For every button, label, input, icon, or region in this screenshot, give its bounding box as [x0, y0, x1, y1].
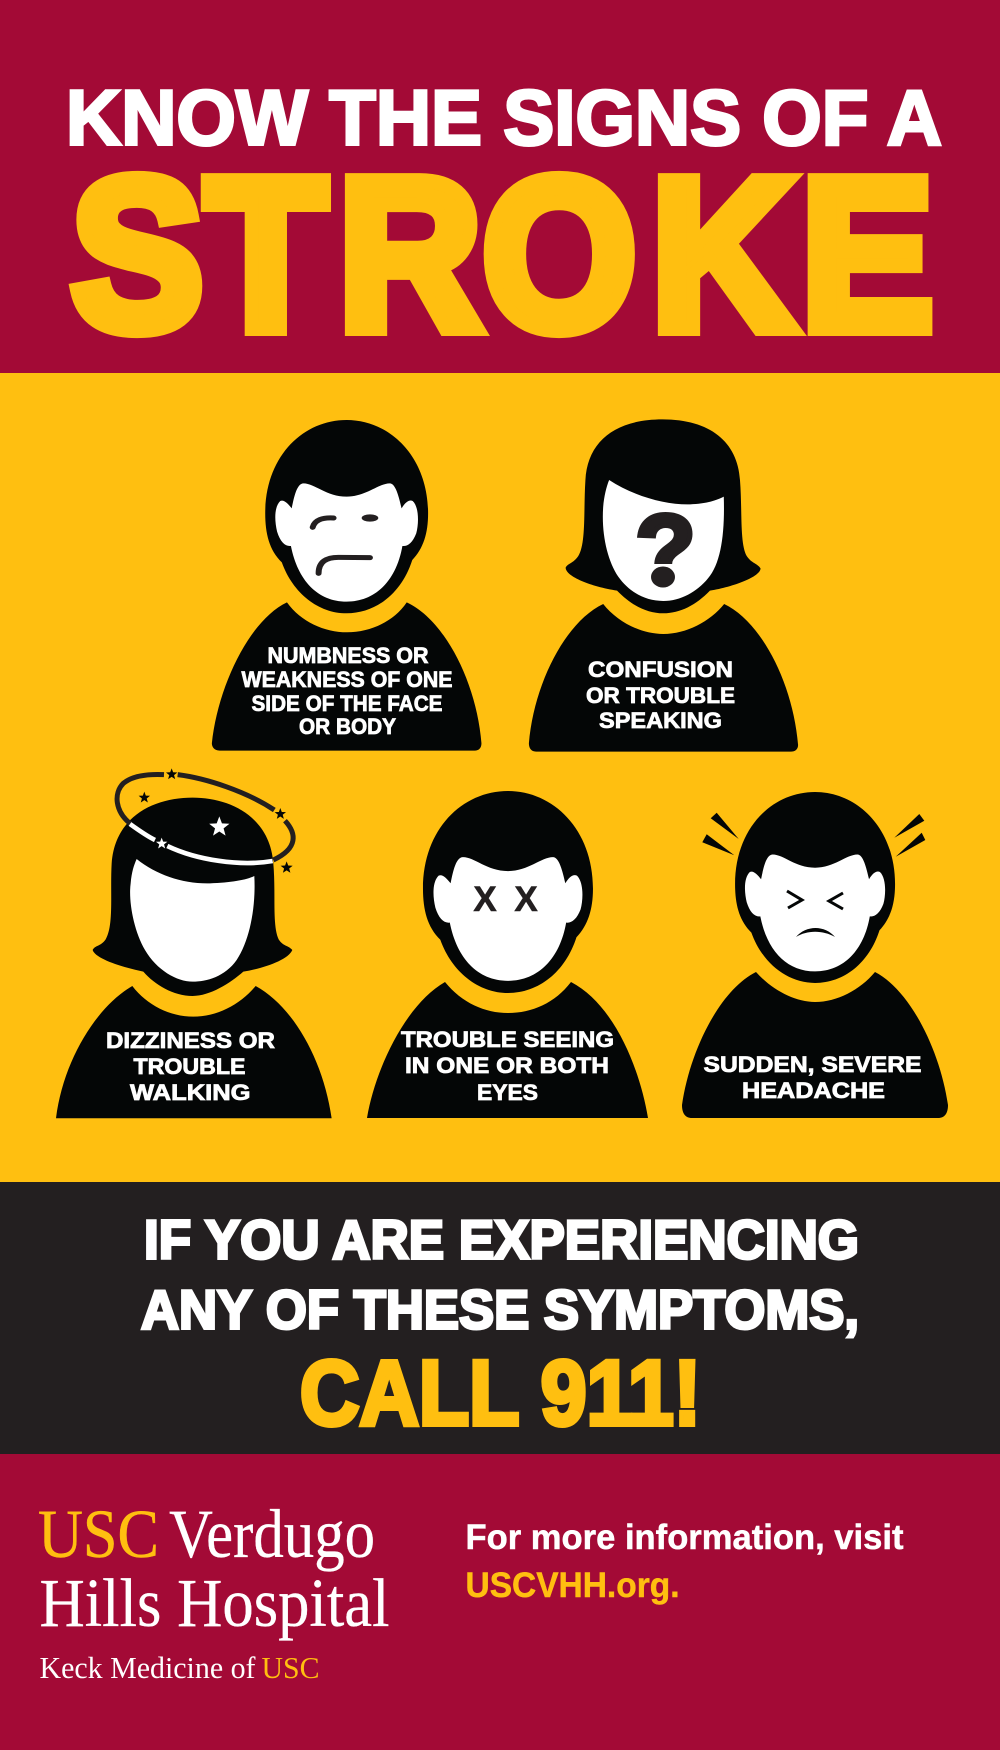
icon: man wincing with pain lines	[682, 792, 948, 1118]
label: numbness	[242, 643, 452, 739]
label: headache: SUDDEN, SEVERE	[704, 1052, 922, 1077]
label: trouble seeing: EYES	[477, 1080, 538, 1105]
logo: USC Verdugo Hills Hospital: Keck Medicine of	[40, 1650, 256, 1685]
text: any of these symptoms: ANY OF THESE SYMPTOMS,	[141, 1278, 859, 1340]
logo: USC Verdugo Hills Hospital: Verdugo	[169, 1496, 375, 1572]
panel: symptoms	[0, 373, 1000, 1182]
label: dizziness	[106, 1028, 275, 1105]
label: trouble seeing	[401, 1027, 614, 1105]
label: headache	[704, 1052, 922, 1103]
icon: man with crossed eyes: X	[514, 880, 538, 919]
label: dizziness: WALKING	[130, 1080, 250, 1105]
label: trouble seeing: TROUBLE SEEING	[401, 1027, 614, 1052]
panel: footer	[0, 1454, 1000, 1750]
logo: USC Verdugo Hills Hospital	[38, 1496, 390, 1685]
text: call 911: CALL 911!	[300, 1342, 701, 1444]
label: numbness: SIDE OF THE FACE	[252, 691, 442, 716]
label: numbness: OR BODY	[299, 714, 396, 739]
text: for more information: For more information, visit	[466, 1518, 904, 1557]
label: confusion: CONFUSION	[588, 657, 733, 682]
logo: USC Verdugo Hills Hospital: USC	[262, 1650, 320, 1685]
label: confusion: SPEAKING	[599, 708, 722, 733]
label: headache: HEADACHE	[742, 1078, 885, 1103]
icon: man with crossed eyes: X	[473, 880, 497, 919]
label: dizziness: TROUBLE	[134, 1054, 246, 1079]
label: confusion	[586, 657, 735, 733]
figure: trouble seeing	[367, 791, 648, 1118]
heading: know the signs of a: KNOW THE SIGNS OF A	[66, 74, 942, 162]
text: if you are experiencing: IF YOU ARE EXPERIENCING	[144, 1208, 859, 1270]
label: confusion: OR TROUBLE	[586, 683, 735, 708]
panel: call to action	[0, 1182, 1000, 1454]
logo: USC Verdugo Hills Hospital: USC	[38, 1496, 159, 1572]
label: dizziness: DIZZINESS OR	[106, 1028, 275, 1053]
label: trouble seeing: IN ONE OR BOTH	[405, 1053, 609, 1078]
icon: man with drooping face	[212, 420, 481, 751]
logo: USC Verdugo Hills Hospital: Hills Hospital	[40, 1565, 390, 1641]
figure: headache	[682, 792, 948, 1118]
panel: title banner	[0, 0, 1000, 374]
figure: confusion	[529, 419, 798, 752]
text: website: USCVHH.org.	[466, 1566, 680, 1605]
icon: man with crossed eyes	[367, 791, 648, 1118]
icon: woman with halo of stars	[56, 768, 332, 1118]
icon: question mark: ?	[635, 494, 696, 605]
label: numbness: NUMBNESS OR	[268, 643, 428, 668]
figure: dizziness	[56, 768, 332, 1118]
label: numbness: WEAKNESS OF ONE	[242, 667, 452, 692]
heading: stroke: STROKE	[71, 134, 933, 374]
icon: woman with question mark	[529, 419, 798, 752]
figure: numbness	[212, 420, 481, 751]
